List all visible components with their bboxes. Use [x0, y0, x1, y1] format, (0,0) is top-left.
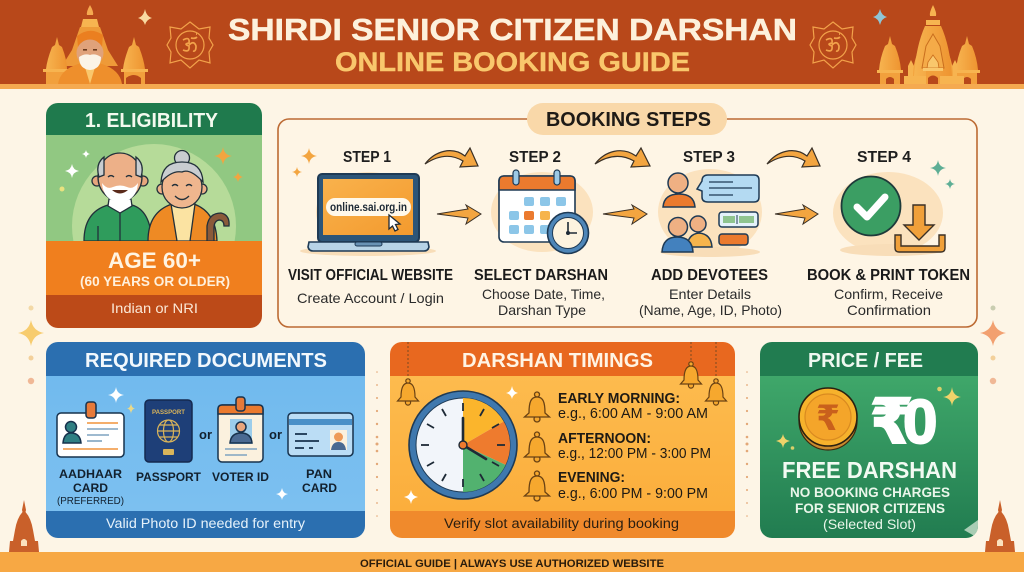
icon: right temple — [877, 5, 980, 84]
footer bar — [0, 552, 1024, 572]
heading: required documents: REQUIRED DOCUMENTS — [85, 350, 327, 372]
step 3 description: (Name, Age, ID, Photo) — [639, 302, 782, 318]
icon: bell morning — [524, 392, 550, 422]
icon: right sparkle — [873, 9, 887, 25]
icon: Aadhaar card — [57, 402, 124, 457]
panel: eligibility — [46, 103, 262, 328]
icon: calendar and clock — [491, 170, 593, 254]
text: evening: EVENING: — [558, 470, 625, 486]
text: photo ID note: Valid Photo ID needed for entry — [106, 516, 305, 531]
label: PAN card: CARD — [302, 481, 337, 495]
step 4 description — [834, 286, 943, 318]
text: zero rupees: ₹0 — [870, 388, 937, 457]
label: voter ID: VOTER ID — [212, 470, 269, 484]
icon: laptop with website address — [300, 172, 436, 256]
clock with time slots — [409, 391, 517, 499]
text: early morning: e.g., 6:00 AM - 9:00 AM — [558, 406, 708, 422]
icon: woman — [148, 150, 229, 241]
icon: passport: PASSPORT — [152, 409, 185, 416]
step 3 label: STEP 3 — [683, 149, 735, 166]
step 4 title: BOOK & PRINT TOKEN — [807, 267, 970, 284]
arrow: step 3 to 4 curved — [767, 148, 820, 167]
step 2 label: STEP 2 — [509, 149, 561, 166]
label: Aadhaar card: CARD — [73, 481, 108, 495]
heading: booking steps — [527, 103, 727, 135]
decoration: left sparkle and dots — [18, 306, 44, 384]
label: Aadhaar card: AADHAAR — [59, 467, 122, 481]
illustration: elderly couple — [60, 144, 243, 241]
text: afternoon: e.g., 12:00 PM - 3:00 PM — [558, 446, 711, 462]
icon: teal sparkles — [930, 160, 955, 189]
decoration: right sparkle and dots — [980, 306, 1006, 384]
label: Aadhaar card: (PREFERRED) — [57, 496, 124, 507]
label: PAN card — [302, 467, 337, 495]
footer bar: OFFICIAL GUIDE | ALWAYS USE AUTHORIZED WEBSITE — [360, 558, 664, 570]
decoration: hanging bell right 1 — [680, 342, 702, 388]
icon: sparkles — [404, 386, 518, 504]
text: 60 years or older: (60 YEARS OR OLDER) — [80, 274, 230, 289]
decoration: bottom left temple — [9, 500, 39, 552]
text: no booking charges: NO BOOKING CHARGES — [790, 484, 950, 500]
step 3 description — [639, 286, 782, 318]
icon: right Om medallion — [810, 22, 856, 68]
step 4 — [807, 149, 970, 318]
heading: eligibility: 1. ELIGIBILITY — [85, 110, 219, 132]
step 4 description: Confirmation — [847, 302, 931, 318]
icon: laptop with website address: online.sai.org.in — [330, 202, 407, 214]
heading: price and fee: PRICE / FEE — [808, 350, 923, 372]
heading: booking steps: BOOKING STEPS — [546, 109, 711, 131]
icon: bell evening — [524, 471, 550, 501]
panel: price and fee — [760, 342, 978, 538]
icon: sparkles — [108, 387, 288, 500]
icon: sparkles — [60, 147, 243, 192]
text: free darshan: FREE DARSHAN — [782, 457, 957, 483]
icon: left Om medallion — [167, 22, 213, 68]
text: evening — [558, 470, 708, 502]
text: no booking charges: FOR SENIOR CITIZENS — [795, 500, 945, 516]
arrow: step 2 to 3 straight — [603, 205, 647, 224]
step 3 description: Enter Details — [669, 286, 751, 302]
step 2 — [474, 149, 608, 318]
icon: left sparkle — [138, 9, 152, 25]
arrow: step 2 to 3 curved — [595, 148, 650, 167]
step 1 — [288, 149, 453, 306]
step 2 description: Darshan Type — [498, 302, 586, 318]
icon: man — [84, 153, 152, 241]
panel: required documents — [46, 342, 365, 538]
panel: darshan timings — [390, 342, 735, 538]
heading: darshan timings: DARSHAN TIMINGS — [462, 350, 653, 372]
text: no booking charges: (Selected Slot) — [823, 516, 916, 532]
step 2 title: SELECT DARSHAN — [474, 267, 608, 284]
decoration: hanging bell left — [398, 342, 418, 405]
step 3 — [639, 149, 782, 318]
decoration: bottom right temple — [985, 500, 1015, 552]
text: afternoon — [558, 431, 711, 462]
icon: PAN card — [288, 413, 353, 456]
subtitle: ONLINE BOOKING GUIDE — [335, 47, 690, 77]
panel: booking steps — [278, 103, 977, 327]
text: or: or — [199, 427, 212, 442]
label: Aadhaar card — [57, 467, 124, 507]
step 3 title: ADD DEVOTEES — [651, 267, 768, 284]
header banner — [0, 0, 1024, 89]
text: no booking charges — [790, 484, 950, 532]
text: evening: e.g., 6:00 PM - 9:00 PM — [558, 486, 708, 502]
decoration: hanging bell right 2 — [706, 342, 726, 405]
icon: rupee coin — [799, 388, 857, 450]
icon: confirmation check and download — [833, 172, 945, 256]
label: PAN card: PAN — [306, 467, 332, 481]
text: verify slot note: Verify slot availability during booking — [444, 516, 679, 531]
arrow: step 1 to 2 curved — [425, 148, 478, 167]
step 1 label: STEP 1 — [343, 149, 391, 166]
step 4 description: Confirm, Receive — [834, 286, 943, 302]
icon: sparkles near step 1 — [292, 148, 317, 177]
text: early morning — [558, 391, 708, 422]
text: or: or — [269, 427, 282, 442]
step 2 description — [482, 286, 605, 318]
title: SHIRDI SENIOR CITIZEN DARSHAN — [228, 12, 797, 47]
icon: left temple with Sai Baba portrait — [43, 5, 148, 84]
text: Indian or NRI: Indian or NRI — [111, 301, 198, 316]
step 1 description: Create Account / Login — [297, 290, 444, 306]
icon: rupee coin: ₹ — [816, 399, 840, 438]
icon: devotees and forms — [658, 169, 762, 257]
arrow: step 3 to 4 straight — [775, 205, 818, 224]
label: passport: PASSPORT — [136, 470, 202, 484]
icon: bell afternoon — [524, 432, 550, 462]
text: afternoon: AFTERNOON: — [558, 431, 651, 447]
step 1 title: VISIT OFFICIAL WEBSITE — [288, 267, 453, 284]
step 4 label: STEP 4 — [857, 149, 911, 166]
arrow: step 1 to 2 straight — [437, 205, 481, 224]
icon: passport — [145, 400, 192, 462]
icon: voter ID — [218, 397, 263, 462]
step 2 description: Choose Date, Time, — [482, 286, 605, 302]
text: age 60+: AGE 60+ — [108, 248, 201, 273]
icon: sparkles — [776, 387, 961, 450]
text: early morning: EARLY MORNING: — [558, 391, 680, 407]
